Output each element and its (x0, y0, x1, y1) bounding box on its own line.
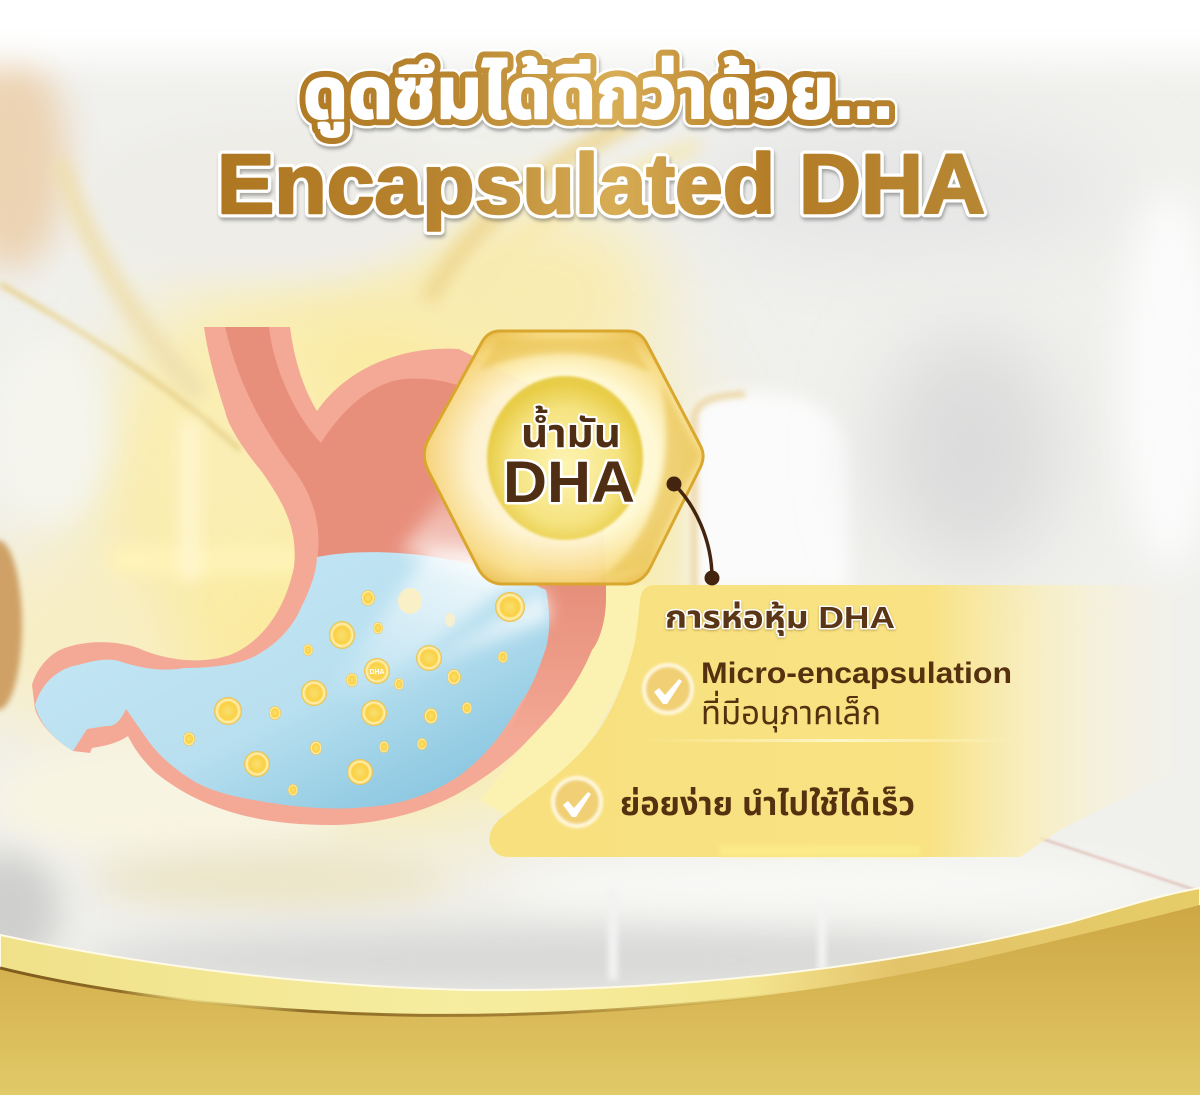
info panel content (553, 600, 1040, 826)
title line: Thai, gold outline: ดูดซึมได้ดีกว่าด้วย... (303, 54, 893, 137)
hexagon shell (424, 331, 703, 584)
title line: Encapsulated DHA (217, 137, 985, 231)
droplet label: DHA (369, 669, 385, 676)
divider glow (640, 739, 1040, 742)
label: DHA: DHA (503, 450, 635, 515)
panel bottom highlight (720, 846, 920, 856)
oil droplets (183, 588, 525, 796)
oil core (487, 376, 643, 540)
title line: Thai, white fill: ดูดซึมได้ดีกว่าด้วย... (303, 54, 893, 137)
hexagon top sheen (480, 338, 650, 372)
connector line from capsule to panel (666, 476, 720, 586)
icon: check 2 (553, 778, 601, 826)
label: น้ำมัน: น้ำมัน (521, 405, 621, 456)
title line: Thai, outer white outline: ดูดซึมได้ดีกว่าด้วย... (303, 54, 893, 137)
icon: check 1 (644, 665, 692, 713)
title (303, 54, 893, 137)
light ray through liquid (330, 548, 550, 700)
list item 1 title: Micro-encapsulation (701, 657, 1012, 690)
English title fill: Encapsulated DHA (217, 137, 985, 231)
stomach illustration (32, 327, 606, 825)
stomach right wall shading (500, 570, 606, 745)
hexagon right shade (600, 380, 700, 580)
golden wave footer (0, 888, 1200, 1095)
stomach liquid (35, 552, 549, 808)
list item 1 detail: ที่มีอนุภาคเล็ก (701, 690, 881, 733)
English title outline: Encapsulated DHA (217, 137, 985, 231)
pale glow above liquid (400, 460, 530, 590)
list item 2: ย่อยง่าย นำไปใช้ได้เร็ว (620, 785, 915, 822)
yellow info panel backdrop (489, 585, 1200, 857)
DHA oil hexagon capsule (424, 331, 703, 584)
stomach inner lining (225, 327, 530, 560)
pale glow band beside stomach (480, 585, 660, 815)
panel heading: การห่อหุ้ม DHA (665, 600, 895, 636)
stomach outer wall (32, 327, 606, 825)
